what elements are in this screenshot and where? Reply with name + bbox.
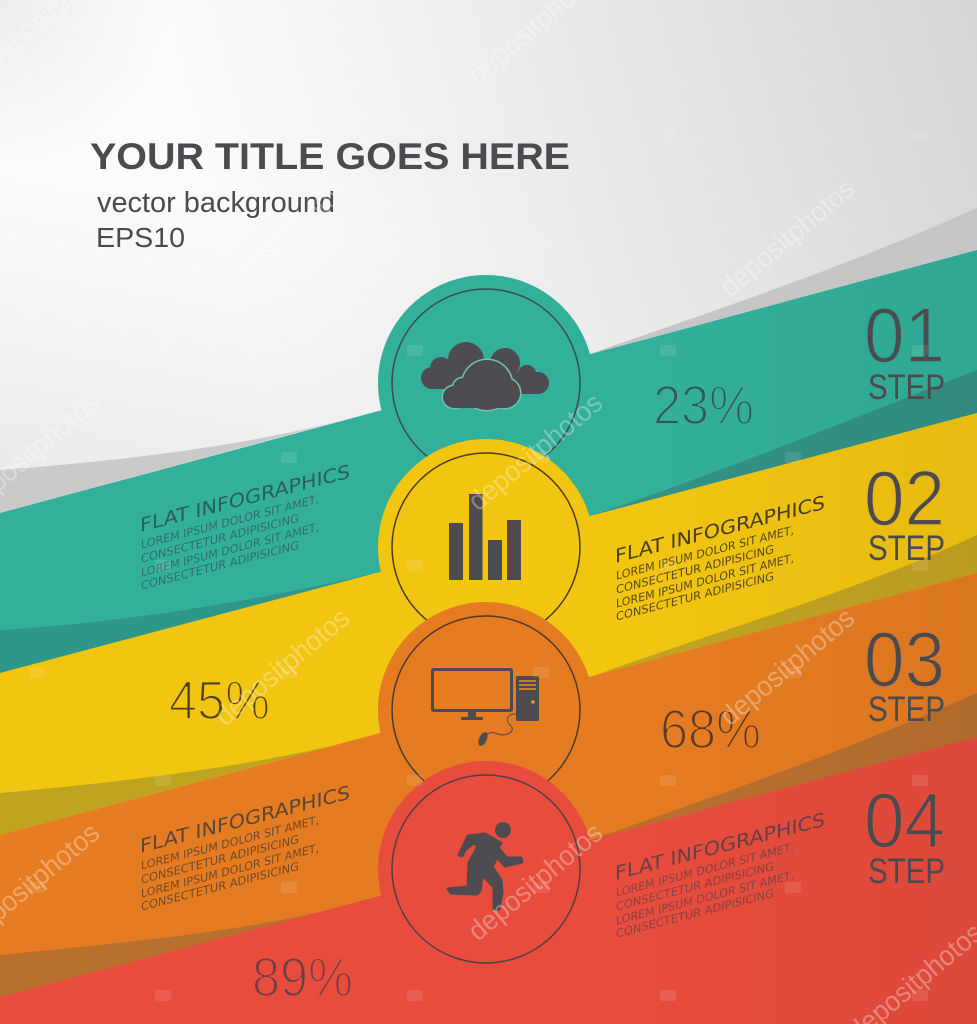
title: YOUR TITLE GOES HERE <box>90 136 570 177</box>
subtitle: vector background <box>97 187 335 219</box>
step 04 label: STEP <box>868 852 945 891</box>
percent 89: 89% <box>252 946 353 1008</box>
teal shadow <box>0 370 977 673</box>
band 3 text: FLAT INFOGRAPHICS <box>140 781 350 858</box>
band 2 text: FLAT INFOGRAPHICS <box>615 491 825 568</box>
band 3 text <box>140 781 350 914</box>
step 04 number: 04 <box>864 776 945 864</box>
watermark text: depositphotos <box>714 602 860 732</box>
percent 68: 68% <box>660 698 761 760</box>
icon: desktop computer <box>432 670 539 747</box>
band 1 text: FLAT INFOGRAPHICS <box>140 460 350 537</box>
band 1: teal <box>0 250 977 1024</box>
watermark text: depositphotos <box>462 817 608 947</box>
right edge shading <box>640 250 977 1024</box>
band 4: red <box>0 737 977 1024</box>
format label: EPS10 <box>96 222 185 253</box>
band 1 text: LOREM IPSUM DOLOR SIT AMET, <box>141 520 319 580</box>
watermark text: depositphotos <box>209 602 355 732</box>
band 4 text: CONSECTETUR ADIPISICING <box>616 859 774 914</box>
band 2 text: CONSECTETUR ADIPISICING <box>616 569 774 624</box>
step 03 number: 03 <box>864 615 945 703</box>
step 03 label: STEP <box>868 690 945 729</box>
icon: bar chart <box>449 494 521 580</box>
band 3 text: CONSECTETUR ADIPISICING <box>141 859 299 914</box>
step 02 number: 02 <box>864 454 945 542</box>
band 4 text: FLAT INFOGRAPHICS <box>615 808 825 885</box>
band 2 text <box>615 491 825 624</box>
band 3 text: LOREM IPSUM DOLOR SIT AMET, <box>141 813 319 873</box>
band 4 text <box>615 808 825 941</box>
step 01 label: STEP <box>868 368 945 407</box>
watermark camera marks <box>29 130 928 1001</box>
percent 45: 45% <box>169 669 270 731</box>
band 2: yellow <box>0 413 977 1024</box>
band 4 text: CONSECTETUR ADIPISICING <box>616 886 774 941</box>
band 1 text: CONSECTETUR ADIPISICING <box>141 538 299 593</box>
step 02 label: STEP <box>868 529 945 568</box>
watermark text: depositphotos <box>209 173 355 303</box>
step 01 number: 01 <box>864 291 945 379</box>
icon: clouds <box>421 342 549 410</box>
icon: running person <box>448 822 522 909</box>
band 1 text <box>140 460 350 593</box>
band 3 text: LOREM IPSUM DOLOR SIT AMET, <box>141 841 319 901</box>
watermark text: depositphotos <box>714 173 860 303</box>
circle 3: orange <box>378 602 594 818</box>
circle 4: red <box>378 761 594 977</box>
orange shadow <box>0 693 977 997</box>
band 2 text: LOREM IPSUM DOLOR SIT AMET, <box>616 523 794 583</box>
circle 1: teal <box>378 275 594 491</box>
percent 23: 23% <box>653 374 754 436</box>
band 1 text: CONSECTETUR ADIPISICING <box>141 511 299 566</box>
band 3 text: CONSECTETUR ADIPISICING <box>141 832 299 887</box>
watermark text: depositphotos <box>462 387 608 517</box>
band 3: orange <box>0 573 977 1024</box>
band 1 text: LOREM IPSUM DOLOR SIT AMET, <box>141 492 319 552</box>
grey band shadow <box>0 208 977 513</box>
band 2 text: LOREM IPSUM DOLOR SIT AMET, <box>616 551 794 611</box>
circle 2: yellow <box>378 439 594 655</box>
yellow shadow <box>0 535 977 835</box>
band 4 text: LOREM IPSUM DOLOR SIT AMET, <box>616 868 794 928</box>
band 4 text: LOREM IPSUM DOLOR SIT AMET, <box>616 840 794 900</box>
band 2 text: CONSECTETUR ADIPISICING <box>616 542 774 597</box>
